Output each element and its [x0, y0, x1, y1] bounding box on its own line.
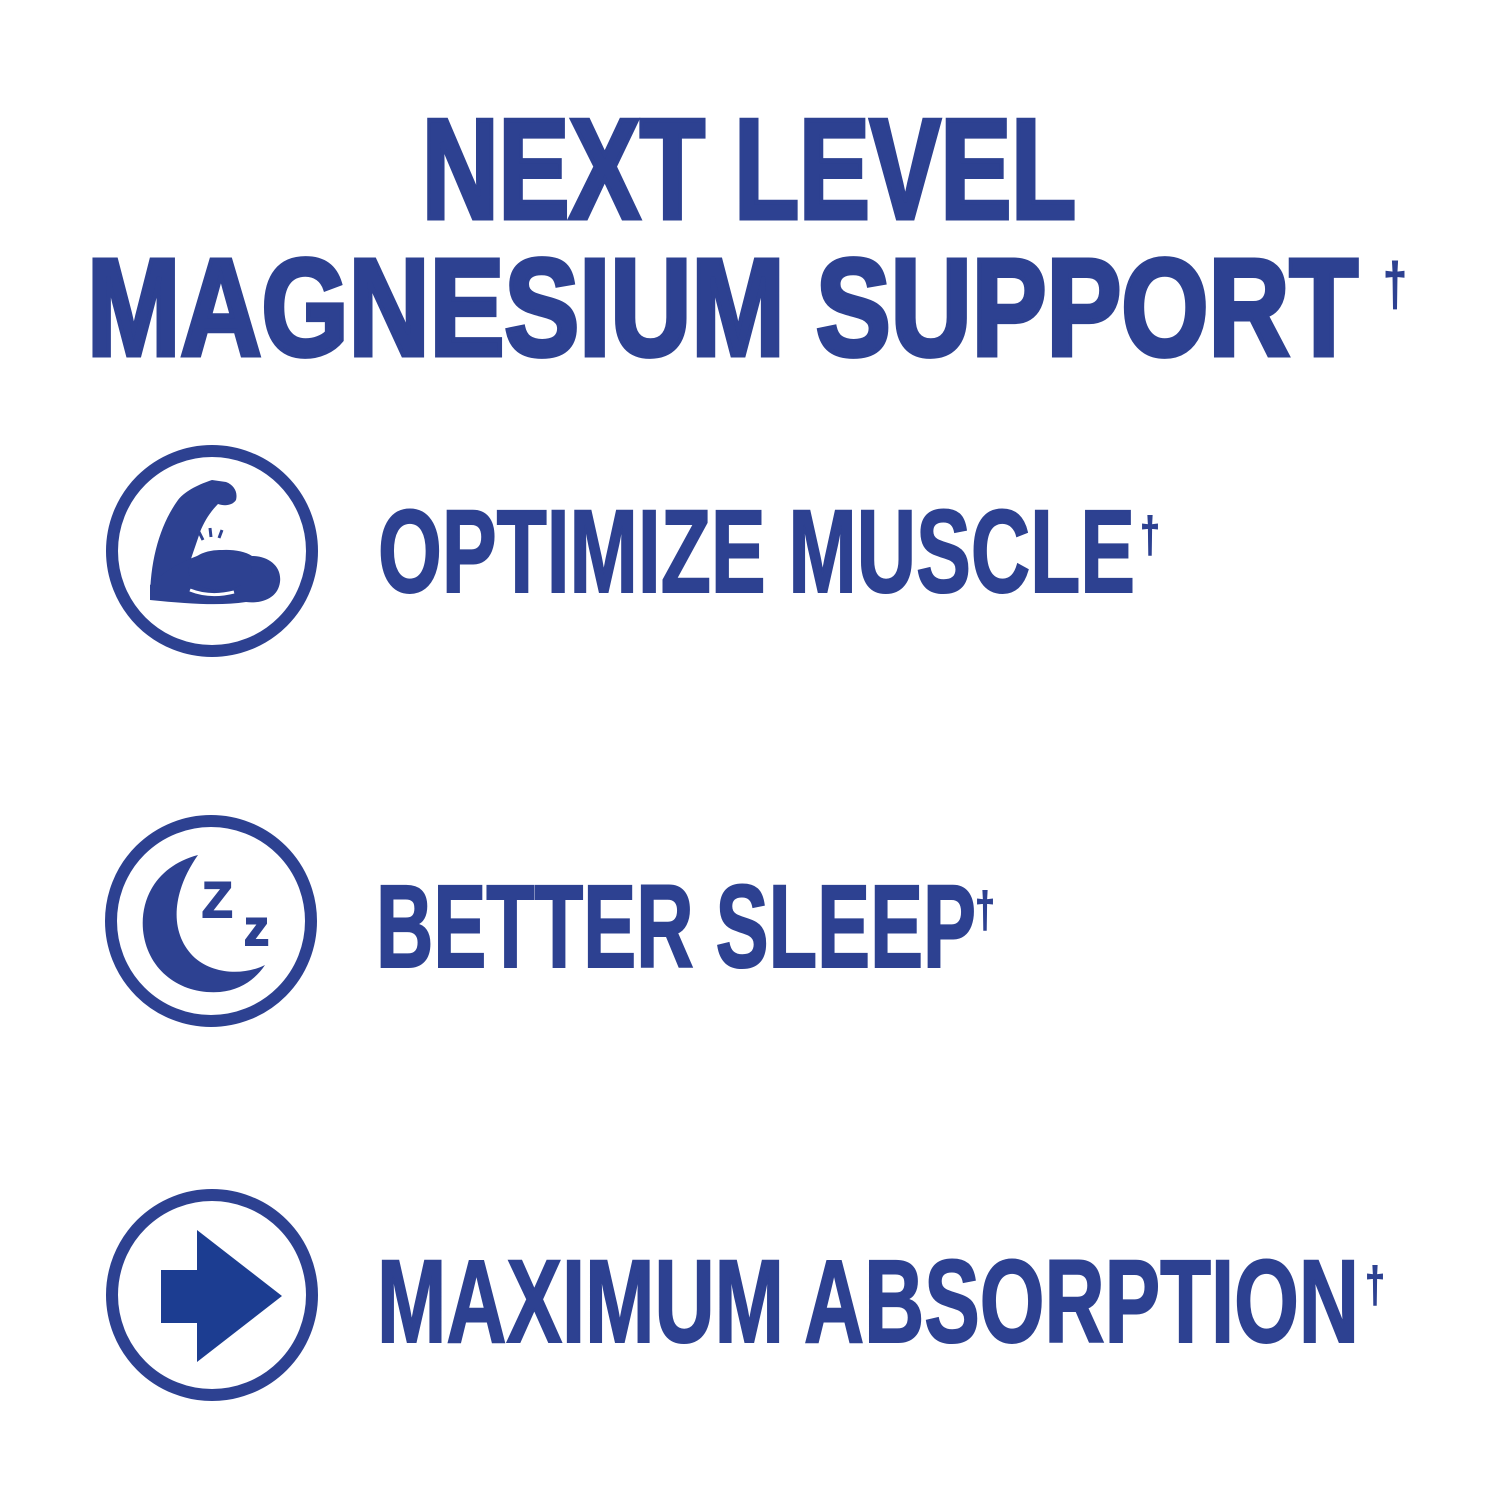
text: optimize muscle: OPTIMIZE MUSCLE: [378, 486, 1135, 618]
text: better sleep: †: [975, 882, 995, 938]
icon: moon with Zz: z: [244, 900, 269, 956]
item: optimize muscle: [112, 451, 1160, 651]
title: [87, 90, 1407, 385]
item: better sleep: [111, 821, 995, 1021]
title: NEXT LEVEL: [422, 90, 1076, 249]
icon: flexed arm: [112, 451, 312, 651]
icon: arrow: [112, 1195, 312, 1395]
text: optimize muscle: †: [1140, 507, 1160, 563]
item: maximum absorption: [112, 1195, 1385, 1395]
text: better sleep: BETTER SLEEP: [376, 861, 976, 993]
icon: moon with Zz: Z: [202, 872, 233, 928]
title: †: [1383, 251, 1407, 318]
text: better sleep: [376, 861, 995, 993]
icon: moon with Zz: [111, 821, 311, 1021]
text: maximum absorption: †: [1365, 1257, 1385, 1313]
